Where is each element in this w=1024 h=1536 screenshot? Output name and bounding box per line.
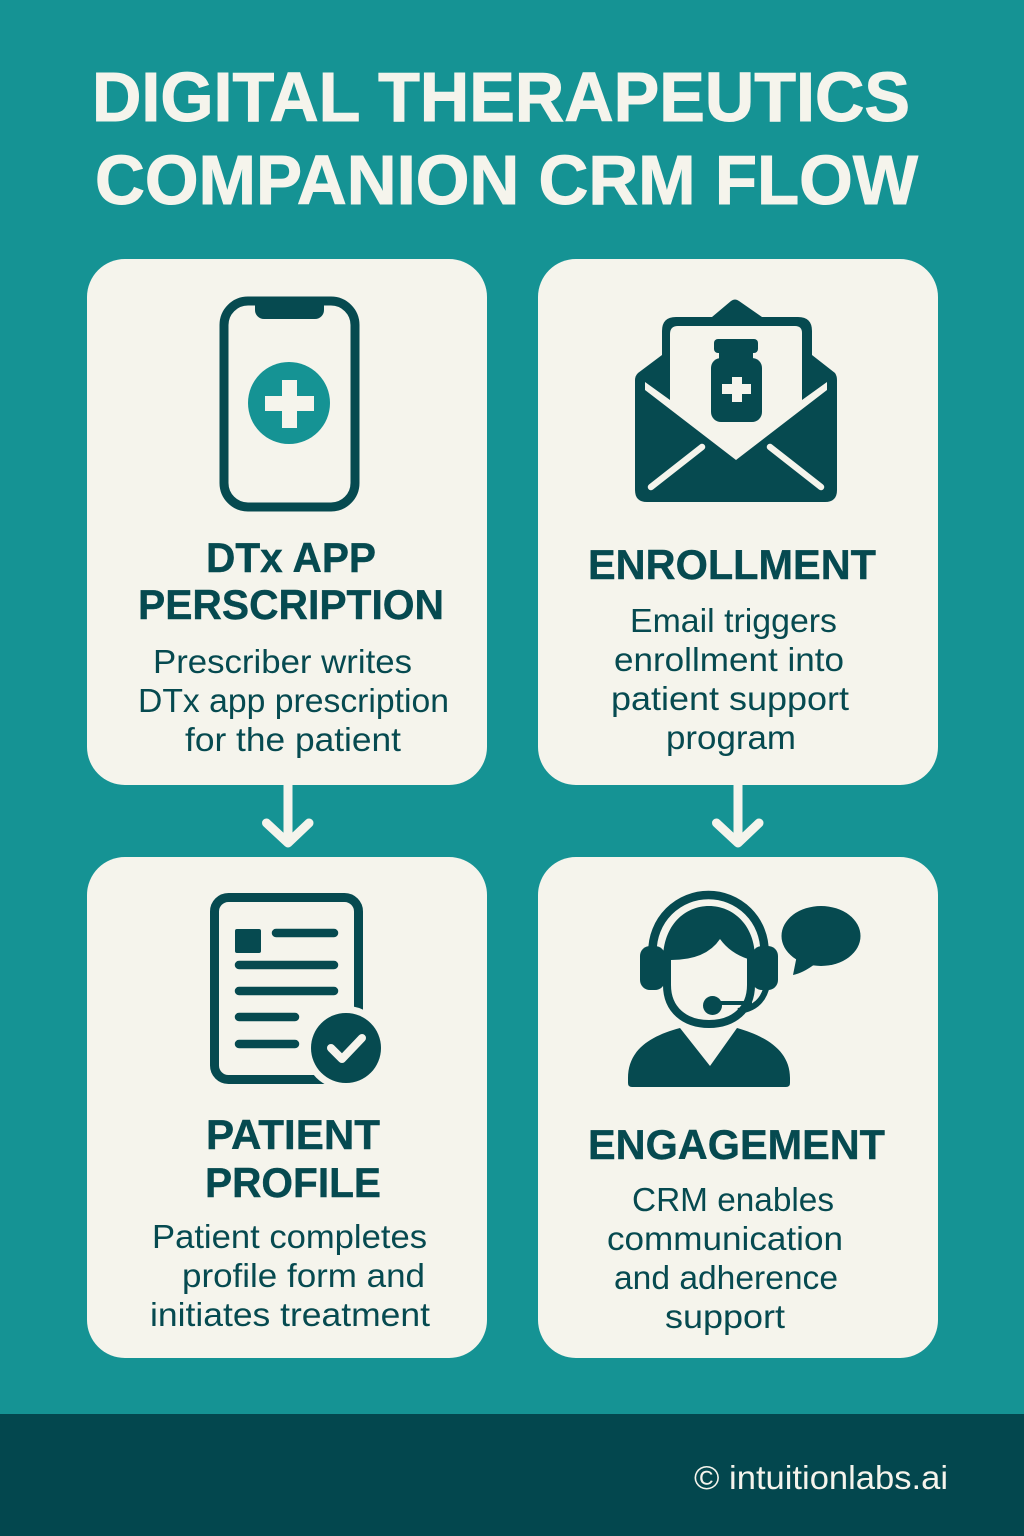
title: COMPANION CRM FLOW [95, 141, 918, 219]
text: enrollment description: Email triggers [630, 602, 837, 639]
heading: enrollment: ENROLLMENT [588, 541, 876, 588]
heading: DTx app perscription: PERSCRIPTION [138, 581, 444, 628]
icon: phone with medical cross [224, 300, 355, 507]
text: enrollment description: patient support [611, 680, 849, 717]
icon: envelope with medicine bottle [635, 300, 837, 502]
text: engagement description [607, 1181, 843, 1335]
text: engagement description: support [665, 1298, 785, 1335]
text: prescription description: for the patient [185, 721, 401, 758]
text: prescription description: Prescriber writes [153, 643, 412, 680]
text: prescription description: DTx app prescription [138, 682, 449, 719]
arrow: enrollment to engagement [716, 785, 759, 843]
text: patient profile description: initiates treatment [150, 1296, 430, 1333]
heading: engagement: ENGAGEMENT [588, 1121, 885, 1168]
heading: patient profile: PATIENT [206, 1111, 380, 1158]
text: enrollment description: program [666, 719, 796, 756]
title [92, 58, 918, 219]
heading: DTx app perscription [138, 534, 444, 628]
heading: DTx app perscription: DTx APP [206, 534, 376, 581]
text: patient profile description: profile form and [182, 1257, 425, 1294]
title: DIGITAL THERAPEUTICS [92, 58, 910, 136]
heading: patient profile [205, 1111, 381, 1206]
text: engagement description: and adherence [614, 1259, 838, 1296]
text: prescription description [138, 643, 449, 758]
panel: patient profile [87, 857, 487, 1358]
text: enrollment description [611, 602, 849, 756]
panel: DTx app prescription [87, 259, 487, 785]
text: patient profile description [150, 1218, 430, 1333]
text: enrollment description: enrollment into [614, 641, 844, 678]
heading: patient profile: PROFILE [205, 1159, 381, 1206]
icon: support agent with headset and speech bubble [628, 895, 860, 1087]
text: engagement description: CRM enables [632, 1181, 834, 1218]
arrow: prescription to profile [266, 785, 309, 843]
text: engagement description: communication [607, 1220, 843, 1257]
panel: engagement [538, 857, 938, 1358]
panel: enrollment [538, 259, 938, 785]
footer credit: © intuitionlabs.ai [694, 1459, 948, 1496]
icon: profile form with check badge [214, 898, 388, 1090]
text: patient profile description: Patient completes [152, 1218, 427, 1255]
footer bar [0, 1414, 1024, 1536]
